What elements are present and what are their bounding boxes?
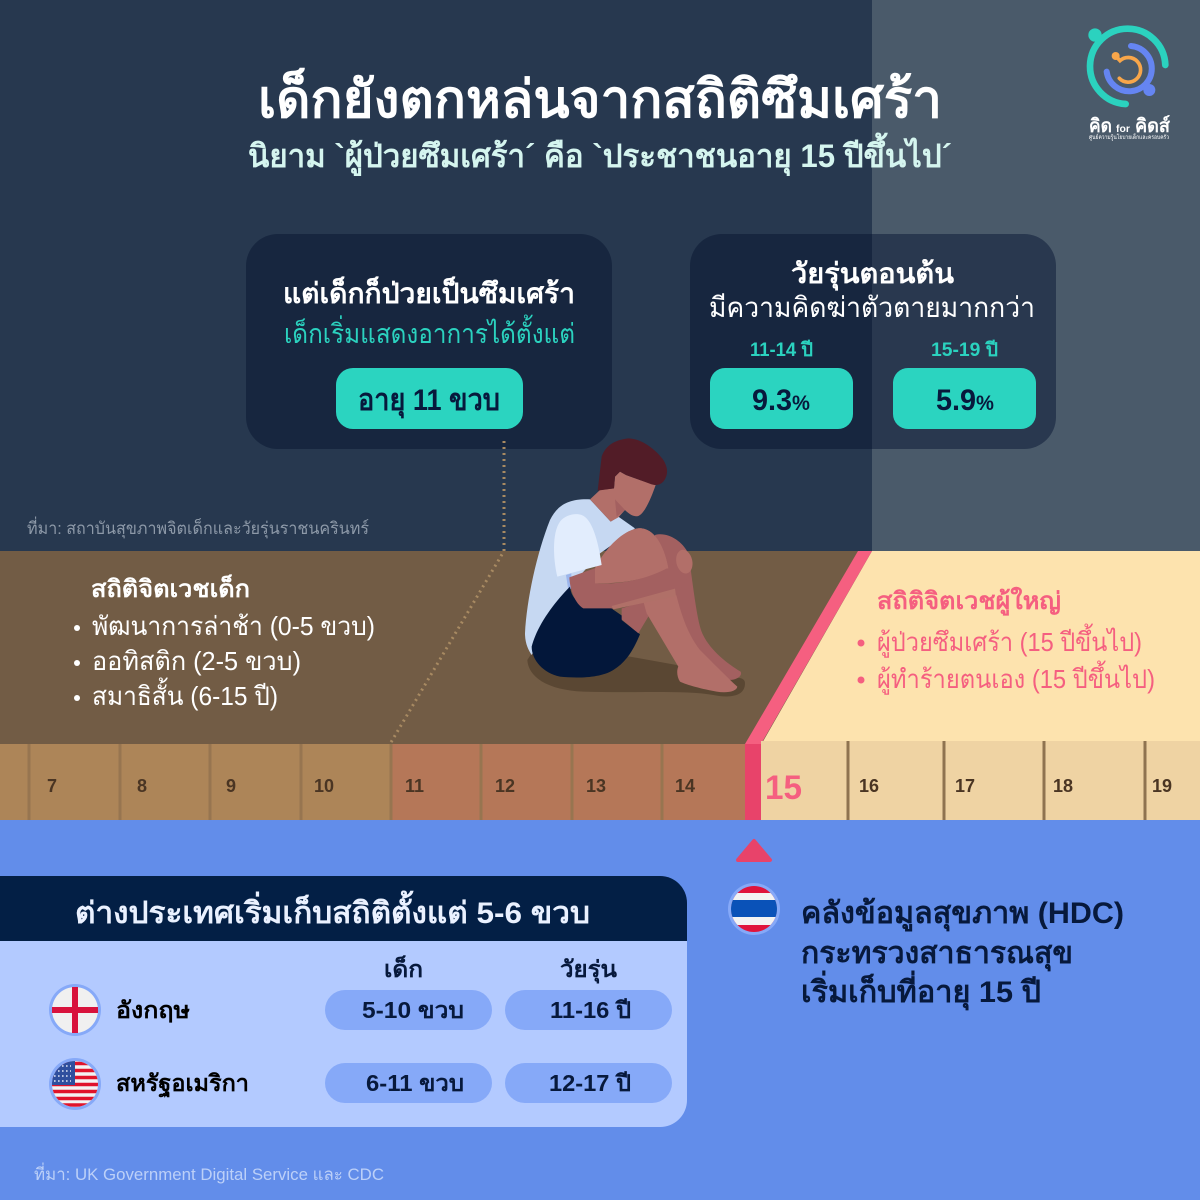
panel subheading: มีความคิดฆ่าตัวตายมากกว่า [709,292,1035,323]
age ruler: 18 [1053,776,1073,796]
age ruler: 11 [405,776,424,796]
panel subheading: เด็กเริ่มแสดงอาการได้ตั้งแต่ [284,314,575,349]
stat 5.9%: 5.9% [936,384,994,417]
list: child psychiatry [74,611,375,711]
pill: England teens [505,990,672,1030]
blue lower background [0,820,1200,1200]
list: child psychiatry: ออทิสติก (2-5 ขวบ) [92,646,301,676]
text: HDC: คลังข้อมูลสุขภาพ (HDC) [801,897,1124,932]
age ruler: 19 [1152,776,1172,796]
text: HDC: กระทรวงสาธารณสุข [801,937,1073,972]
ground: child psychiatry area [0,551,880,745]
icon: logo คิด for คิดส์: for [1116,124,1130,135]
seated child illustration [525,438,745,696]
list: child psychiatry: สมาธิสั้น (6-15 ปี) [92,677,278,711]
text: HDC: เริ่มเก็บที่อายุ 15 ปี [801,970,1041,1011]
column heading: children: เด็ก [384,954,423,982]
list: adult psychiatry [858,623,1155,695]
panel: foreign statistics table: ต่างประเทศเริ่มเก็บสถิติตั้งแต่ 5-6 ขวบ [75,890,590,930]
age ruler: 13 [586,776,606,796]
icon: USA flag [49,1058,101,1110]
pill: England children [325,990,492,1030]
background: dark sky panel [0,0,1200,552]
pill: USA teens: 12-17 ปี [549,1070,631,1096]
table header [0,876,687,941]
pink divider [745,551,872,744]
age ruler: 7 [47,776,57,796]
highlighted age 15: 15 [765,769,802,807]
pill: USA children [325,1063,492,1103]
stat 9.3% [710,368,853,429]
label 11-14: 11-14 ปี [750,339,813,361]
pill: England children: 5-10 ขวบ [362,997,464,1023]
pill: USA teens [505,1063,672,1103]
age ruler: 14 [675,776,695,796]
panel: early teens suicidal ideation [690,234,1056,449]
heading: child psychiatry: สถิติจิตเวชเด็ก [91,574,250,603]
icon: logo คิด for คิดส์: ศูนย์ความรู้นโยบายเด็กและครอบครัว [1089,132,1169,141]
panel heading: วัยรุ่นตอนต้น [791,258,954,291]
row label: England: อังกฤษ [116,997,190,1023]
column heading: teens: วัยรุ่น [560,956,617,984]
age ruler: 9 [226,776,236,796]
pill: England teens: 11-16 ปี [550,997,631,1023]
icon: Thailand flag [728,883,780,935]
age ruler [0,741,1200,820]
stat 9.3%: 9.3% [752,384,810,417]
heading: adult psychiatry: สถิติจิตเวชผู้ใหญ่ [877,586,1061,616]
icon: logo คิด for คิดส์: คิด [1089,116,1112,137]
source: bottom: ที่มา: UK Government Digital Service และ CDC [34,1162,384,1184]
age ruler: 10 [314,776,334,796]
panel heading: แต่เด็กก็ป่วยเป็นซึมเศร้า [283,276,575,309]
stat 5.9% [893,368,1036,429]
badge: age 11 months [336,368,523,429]
panel: children get depression too [246,234,612,449]
title: เด็กยังตกหล่นจากสถิติซึมเศร้า [258,68,942,129]
subtitle: นิยาม `ผู้ป่วยซึมเศร้า´ คือ `ประชาชนอายุ 15 ปีขึ้นไป´ [248,132,952,177]
age ruler: 16 [859,776,879,796]
age ruler: 12 [495,776,515,796]
icon: logo คิด for คิดส์: คิดส์ [1135,115,1170,137]
text: HDC [801,897,1124,1011]
ground: adult psychiatry area [761,551,1200,745]
icon: logo คิด for คิดส์ [1088,28,1170,141]
arrow: pointing to age 15 [738,841,770,860]
icon: England flag [49,984,101,1036]
pill: USA children: 6-11 ขวบ [366,1070,464,1096]
dotted leader line [390,441,504,744]
row label: USA: สหรัฐอเมริกา [116,1070,249,1098]
label 15-19: 15-19 ปี [931,339,998,361]
list: adult psychiatry: ผู้ป่วยซึมเศร้า (15 ปีขึ้นไป) [877,623,1142,658]
panel: foreign statistics table [0,876,687,1127]
age ruler: 17 [955,776,975,796]
badge: age 11 months: อายุ 11 ขวบ [358,384,500,419]
list: child psychiatry: พัฒนาการล่าช้า (0-5 ขวบ) [92,611,375,641]
source: top: ที่มา: สถาบันสุขภาพจิตเด็กและวัยรุ่นราชนครินทร์ [27,516,369,539]
age ruler: 8 [137,776,147,796]
list: adult psychiatry: ผู้ทำร้ายตนเอง (15 ปีขึ้นไป) [877,660,1155,695]
